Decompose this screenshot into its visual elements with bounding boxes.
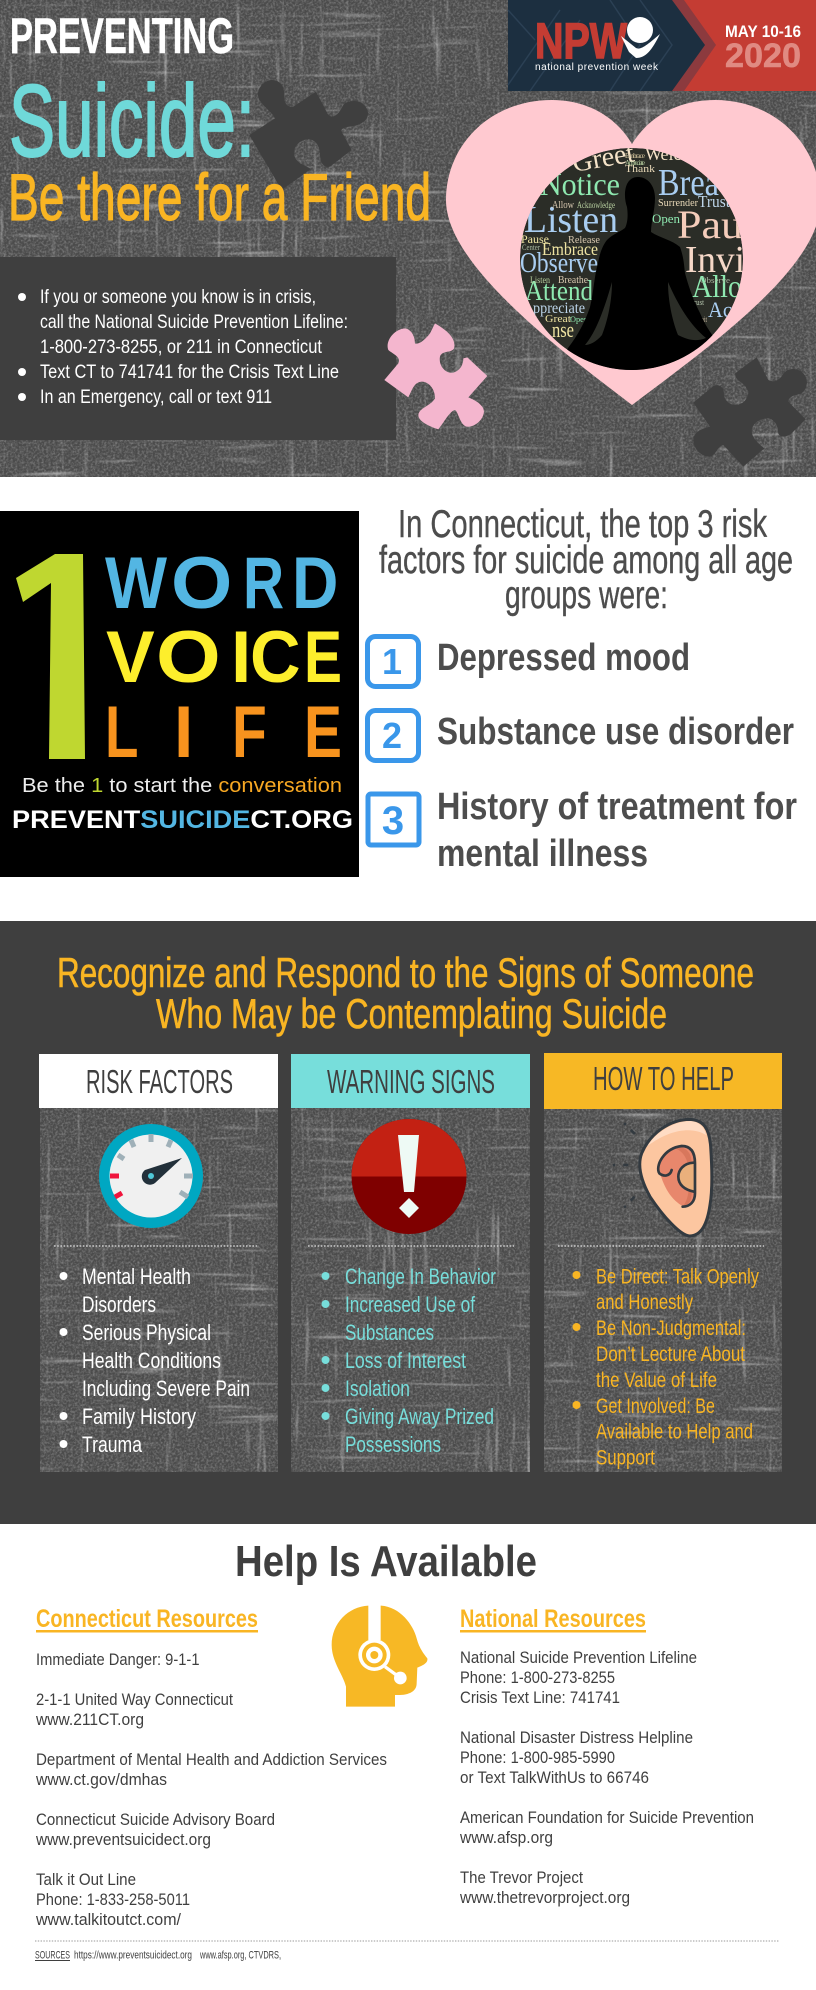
heart with meditation word cloud (446, 100, 816, 405)
list: how to help: and Honestly (596, 1291, 693, 1314)
heading: connecticut resources: Connecticut Resources (36, 1605, 258, 1633)
list: warning signs: Possessions (345, 1432, 441, 1457)
big number one (16, 554, 85, 759)
list: risk factors: Health Conditions (82, 1348, 221, 1373)
word cloud silhouette circle: Appreciate (625, 159, 645, 167)
list: how to help: Be Non-Judgmental: (596, 1317, 746, 1340)
column: connecticut resources: Department of Mental Health and Addiction Services (36, 1750, 387, 1769)
voice (106, 616, 342, 698)
icon: headset head (332, 1603, 427, 1707)
banner: national prevention week: 2020 (725, 37, 801, 75)
voice: E (304, 616, 342, 698)
header: risk factors: RISK FACTORS (86, 1063, 233, 1100)
word cloud silhouette circle: Surrender (658, 197, 698, 209)
word cloud silhouette circle: Pau (677, 202, 743, 247)
column: connecticut resources (35, 1605, 387, 1929)
list: how to help: Don’t Lecture About (596, 1343, 745, 1366)
word: D (292, 542, 338, 624)
word cloud silhouette circle: Greet (570, 138, 637, 179)
word cloud silhouette circle: Breat (658, 162, 728, 204)
risk factor 3 (368, 786, 797, 875)
header: warning signs: WARNING SIGNS (327, 1063, 495, 1100)
banner: national prevention week: national prevention week (535, 62, 659, 73)
column: warning signs (291, 1054, 530, 1472)
banner: national prevention week: MAY 10-16 (725, 22, 801, 41)
life: L (105, 691, 138, 773)
risk factor 2: 2 (382, 715, 402, 756)
list: warning signs: Giving Away Prized (345, 1404, 494, 1429)
column: connecticut resources: www.211CT.org (35, 1710, 144, 1729)
callout: crisis information box (0, 257, 396, 440)
callout: crisis information box: In an Emergency, call or text 911 (40, 387, 272, 408)
sources footnote (35, 1950, 281, 1962)
list: how to help (572, 1266, 759, 1470)
heading: national resources: National Resources (460, 1605, 646, 1633)
list: risk factors: Disorders (82, 1292, 156, 1317)
column: connecticut resources: Talk it Out Line (36, 1870, 136, 1889)
column: national resources: National Suicide Prevention Lifeline (460, 1648, 697, 1667)
website: PREVENT SUICIDE CT.ORG (12, 806, 353, 834)
icon: pink puzzle piece (384, 323, 487, 429)
word: W (105, 542, 167, 624)
column: connecticut resources: www.talkitoutct.com/ (35, 1910, 181, 1929)
column: national resources: The Trevor Project (460, 1868, 583, 1887)
list: risk factors: Trauma (82, 1432, 143, 1457)
word cloud silhouette circle: Ac (708, 297, 732, 322)
column: national resources: American Foundation for Suicide Prevention (460, 1808, 754, 1827)
list: how to help: the Value of Life (596, 1369, 717, 1392)
list: warning signs: Change In Behavior (345, 1264, 496, 1289)
word cloud silhouette circle: Listen (524, 199, 618, 241)
heading: top 3 risk factors: groups were: (505, 574, 668, 617)
header: how to help (544, 1053, 782, 1109)
callout: crisis information box: 1-800-273-8255, or 211 in Connecticut (40, 337, 323, 358)
word cloud silhouette circle: Listen (530, 275, 550, 285)
callout: crisis information box: Text CT to 741741 for the Crisis Text Line (40, 362, 339, 383)
heading: recognize and respond: Who May be Contemplating Suicide (156, 990, 667, 1037)
word (105, 542, 338, 624)
silhouette: gaps between arms and torso (585, 282, 706, 345)
panel: hero chalkboard header (0, 0, 816, 477)
word cloud silhouette circle: Allow (552, 199, 574, 211)
life (105, 691, 342, 773)
word: O (171, 543, 232, 624)
word cloud silhouette circle (520, 138, 745, 375)
life: F (232, 691, 267, 773)
column: how to help (544, 1053, 782, 1472)
list: how to help: Be Direct: Talk Openly (596, 1266, 759, 1288)
word cloud silhouette circle: Observe (520, 248, 598, 279)
column: connecticut resources: Connecticut Suicide Advisory Board (36, 1810, 275, 1829)
word cloud silhouette circle: Welc (645, 144, 682, 164)
word cloud silhouette circle: Admit (693, 315, 708, 324)
icon: dark puzzle piece lower right (693, 357, 807, 467)
heading: recognize and respond (57, 949, 754, 1037)
column: national resources (459, 1605, 754, 1907)
column: connecticut resources: 2-1-1 United Way Connecticut (36, 1690, 233, 1709)
voice: O (156, 616, 221, 698)
word cloud silhouette circle: nse (552, 317, 574, 342)
icon: gauge (99, 1124, 203, 1228)
word cloud silhouette circle: Thank (625, 163, 656, 175)
voice: C (250, 617, 301, 698)
word cloud silhouette circle: ppreciate (533, 300, 585, 317)
tagline: Be the 1 to start the conversation (22, 775, 342, 797)
word cloud silhouette circle: Observe (700, 276, 731, 285)
life: E (304, 691, 342, 773)
word: R (243, 542, 284, 624)
word cloud silhouette circle: Embrace (542, 239, 598, 259)
column: connecticut resources: Immediate Danger: 9-1-1 (36, 1650, 200, 1669)
word cloud silhouette circle: Acknowledge (577, 200, 615, 210)
sources footnote: www.afsp.org, CTVDRS, (199, 1950, 281, 1962)
voice: I (231, 617, 251, 698)
heading: top 3 risk factors (379, 503, 793, 617)
column: connecticut resources: Phone: 1-833-258-5011 (36, 1890, 190, 1909)
list: risk factors: Mental Health (82, 1264, 191, 1289)
risk factor 3: 3 (382, 799, 404, 843)
word cloud silhouette circle: Center (522, 243, 540, 252)
icon: exclamation warning (352, 1119, 466, 1234)
sources footnote: SOURCES (35, 1950, 70, 1962)
list: warning signs: Loss of Interest (345, 1348, 466, 1373)
title: preventing: PREVENTING (10, 8, 234, 64)
life: I (174, 692, 193, 773)
icon: pink heart (446, 100, 816, 405)
column: national resources: or Text TalkWithUs to 66746 (460, 1768, 649, 1787)
risk factor 1: Depressed mood (437, 637, 690, 679)
list: how to help: Get Involved: Be (596, 1395, 715, 1418)
icon: dark puzzle piece behind title (249, 80, 368, 190)
word cloud silhouette circle: Allo (692, 268, 742, 304)
column: national resources: www.afsp.org (459, 1828, 553, 1847)
list: risk factors (60, 1264, 250, 1457)
column: national resources: National Disaster Distress Helpline (460, 1728, 693, 1747)
silhouette: seated figure (567, 177, 712, 370)
word cloud silhouette circle: Trust (690, 298, 705, 307)
column: national resources: Phone: 1-800-985-5990 (460, 1748, 615, 1767)
list: warning signs (322, 1264, 496, 1457)
risk factor 1: 1 (382, 641, 402, 682)
callout: crisis information box: call the National Suicide Prevention Lifeline: (40, 312, 348, 333)
word cloud silhouette circle: Release (568, 234, 600, 246)
column: national resources: Phone: 1-800-273-8255 (460, 1668, 615, 1687)
banner: national prevention week (508, 0, 816, 91)
column: connecticut resources: www.ct.gov/dmhas (35, 1770, 167, 1789)
icon: ear (613, 1119, 712, 1236)
risk factor 3: mental illness (437, 833, 648, 875)
word cloud silhouette circle: Trust (698, 192, 730, 211)
header: risk factors (39, 1054, 278, 1108)
word cloud silhouette circle: Open (570, 315, 588, 324)
list: risk factors: Family History (82, 1404, 196, 1429)
word cloud silhouette circle: Embrace (625, 152, 645, 160)
list: how to help: Available to Help and (596, 1420, 753, 1444)
chalkboard background (0, 0, 816, 477)
list: warning signs: Increased Use of (345, 1292, 476, 1317)
voice: V (106, 617, 155, 698)
list: warning signs: Substances (345, 1320, 434, 1345)
panel: 1 word 1 voice 1 life logo (0, 511, 359, 877)
list: warning signs: Isolation (345, 1376, 410, 1401)
list: risk factors: Serious Physical (82, 1320, 211, 1345)
panel: recognize and respond (0, 921, 816, 1524)
header: warning signs (291, 1054, 530, 1108)
word cloud silhouette circle: Breathe (558, 275, 589, 286)
column: risk factors (39, 1054, 278, 1472)
title: suicide: Suicide: (9, 64, 255, 178)
sources footnote: https://www.preventsuicidect.org (74, 1950, 192, 1962)
subtitle: be there for a friend: Be there for a Friend (8, 160, 431, 234)
column: national resources: Crisis Text Line: 741741 (460, 1688, 620, 1707)
word cloud silhouette circle: Pause (521, 232, 549, 246)
word cloud silhouette circle: Attend (525, 276, 593, 307)
risk factor 1 (368, 636, 690, 686)
word cloud silhouette circle: Open (652, 211, 680, 226)
banner: national prevention week: NPW (535, 13, 628, 69)
word cloud silhouette circle: Invi (685, 239, 745, 281)
heading: help is available: Help Is Available (235, 1537, 537, 1586)
column: national resources: www.thetrevorproject.org (459, 1888, 630, 1907)
word cloud silhouette circle: Great (545, 313, 571, 325)
header: how to help: HOW TO HELP (593, 1060, 734, 1097)
list: risk factors: Including Severe Pain (82, 1376, 250, 1401)
risk factor 2 (368, 710, 794, 760)
word cloud silhouette circle: Notice (540, 166, 620, 202)
column: connecticut resources: www.preventsuicidect.org (35, 1830, 211, 1849)
list: how to help: Support (596, 1446, 655, 1470)
callout: crisis information box: If you or someone you know is in crisis, (40, 287, 316, 308)
